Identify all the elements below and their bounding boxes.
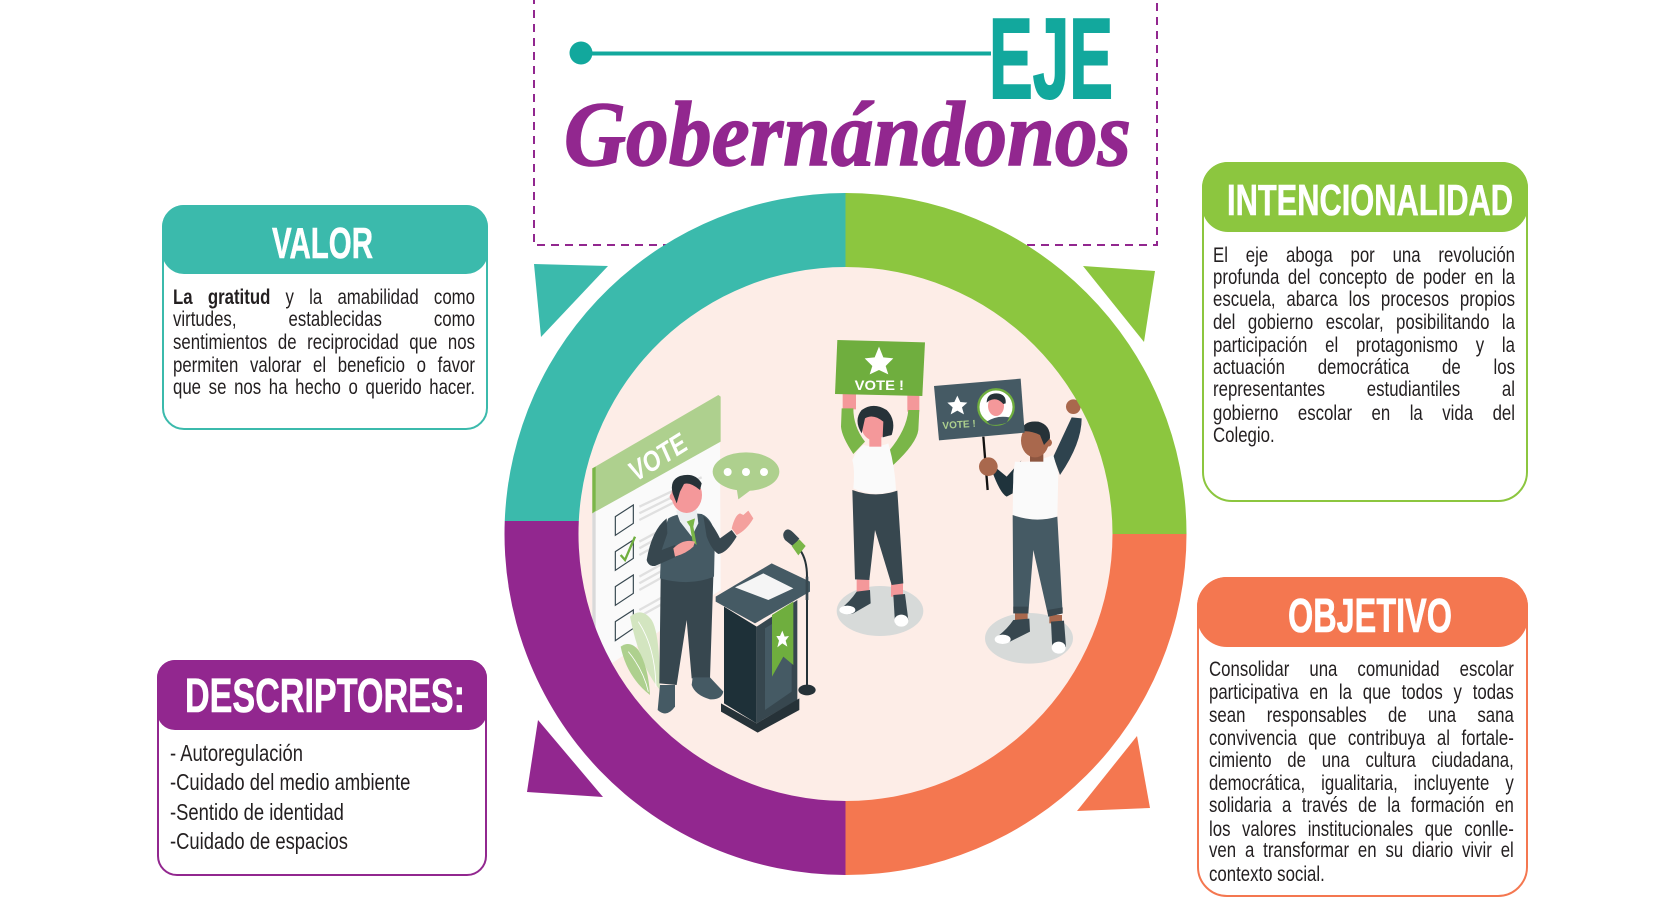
panel: valor <box>162 205 488 430</box>
text: intencionalidad: gobierno escolar en la vida del <box>1213 402 1515 425</box>
text: objetivo: convivencia que contribuya al fortale- <box>1209 727 1514 750</box>
text: valor <box>173 286 475 399</box>
text: intencionalidad: Colegio. <box>1213 424 1275 447</box>
dashed title frame <box>534 0 1157 245</box>
text: descriptores: -Sentido de identidad <box>170 799 344 825</box>
illustration: two supporters with signs <box>835 340 1082 664</box>
text: intencionalidad: actuación democrática de los <box>1213 356 1515 379</box>
ring: teal quadrant <box>505 193 846 521</box>
panel: objetivo <box>1197 577 1528 897</box>
text: intencionalidad: representantes estudiantiles al <box>1213 378 1515 401</box>
ring: green quadrant <box>846 193 1186 534</box>
arrow tip: orange <box>1077 736 1150 811</box>
text: intencionalidad: El eje aboga por una revolución <box>1213 244 1515 267</box>
text: intencionalidad: del gobierno escolar, posibilitando la <box>1213 311 1515 334</box>
text: objetivo <box>1209 658 1514 886</box>
supporter with dark sign <box>979 399 1082 654</box>
panel: descriptores <box>157 660 487 876</box>
green VOTE sign <box>835 340 925 396</box>
microphone <box>783 529 816 695</box>
text: descriptores: -Cuidado del medio ambiente <box>170 769 410 795</box>
ring: purple quadrant <box>505 521 846 875</box>
illustration: candidate, ballot and podium <box>592 395 816 733</box>
text: valor: La gratitud y la amabilidad como <box>173 286 475 309</box>
ground shadows <box>837 586 1073 664</box>
heading: intencionalidad: INTENCIONALIDAD <box>1227 176 1513 225</box>
text: intencionalidad: participación el protagonismo y la <box>1213 334 1515 357</box>
dark VOTE sign with portrait <box>934 379 1025 440</box>
panel: intencionalidad <box>1202 162 1528 502</box>
heading: intencionalidad <box>1202 162 1528 232</box>
candidate <box>647 475 753 713</box>
arrow tip: purple <box>527 720 603 797</box>
text: descriptores: - Autoregulación <box>170 740 303 766</box>
title: EJE with connector <box>570 0 1113 123</box>
speech bubble <box>713 452 779 499</box>
text: objetivo: los valores institucionales que conlle- <box>1209 818 1514 841</box>
heading: descriptores: DESCRIPTORES: <box>185 670 465 723</box>
text: objetivo: participativa en la que todos y todas <box>1209 681 1514 704</box>
ring: orange quadrant <box>846 534 1186 875</box>
text: objetivo: solidaria a través de la formación en <box>1209 794 1514 817</box>
podium <box>716 563 810 733</box>
text: intencionalidad: profunda del concepto de poder en la <box>1213 266 1515 289</box>
text: descriptores <box>170 740 410 854</box>
text: objetivo: Consolidar una comunidad escolar <box>1209 658 1514 681</box>
supporter with green sign <box>839 393 919 627</box>
text: valor: virtudes, establecidas como <box>173 308 475 331</box>
text: objetivo: contexto social. <box>1209 863 1325 886</box>
text: descriptores: -Cuidado de espacios <box>170 828 348 854</box>
ballot board: VOTE <box>625 426 691 488</box>
heading: descriptores <box>157 660 487 730</box>
heading: valor <box>162 205 488 274</box>
text: intencionalidad: escuela, abarca los procesos propios <box>1213 288 1515 311</box>
text: objetivo: democrática, igualitaria, incluyente y <box>1209 772 1514 795</box>
centre pink disc <box>576 264 1116 804</box>
text: objetivo: sean responsables de una sana <box>1209 704 1514 727</box>
arrow tip: green <box>1083 266 1155 342</box>
title: Gobernándonos: Gobernándonos <box>564 83 1131 185</box>
text: valor: permiten valorar el beneficio o favor <box>173 354 475 377</box>
ballot board <box>592 395 721 663</box>
dark VOTE sign with portrait: VOTE ! <box>942 419 976 432</box>
text: valor: sentimientos de reciprocidad que nos <box>173 331 475 354</box>
arrow tip: teal <box>534 264 608 337</box>
text: objetivo: cimiento de una cultura ciudadana, <box>1209 749 1514 772</box>
plants <box>621 612 660 695</box>
green VOTE sign: VOTE ! <box>855 377 904 393</box>
heading: objetivo <box>1197 577 1528 647</box>
text: valor: que se nos ha hecho o querido hacer. <box>173 376 475 399</box>
heading: objetivo: OBJETIVO <box>1288 590 1452 643</box>
text: intencionalidad <box>1213 244 1515 447</box>
text: objetivo: ven a transformar en su diario vivir el <box>1209 839 1514 862</box>
heading: valor: VALOR <box>272 219 373 268</box>
